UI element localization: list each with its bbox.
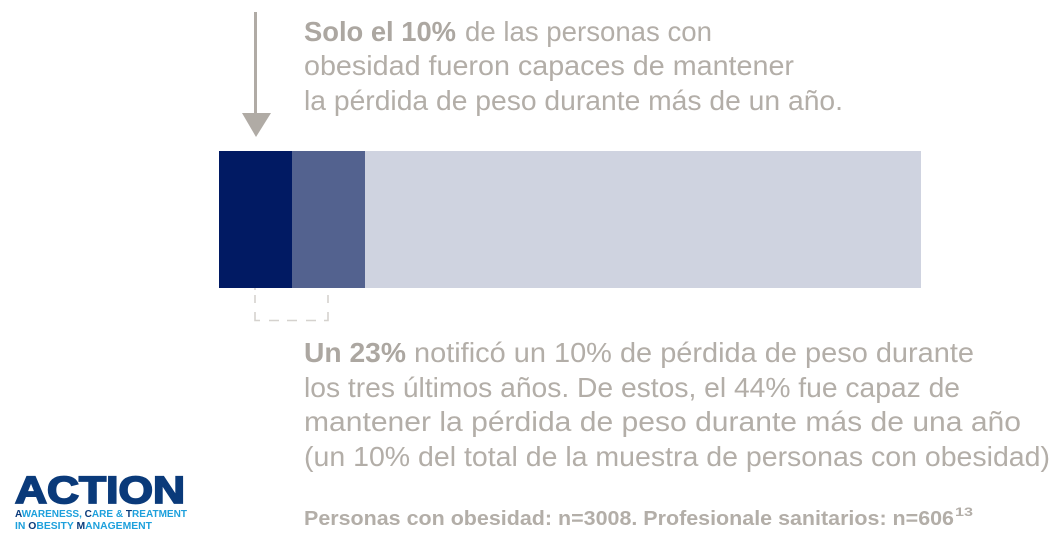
logo: ACTION — [15, 470, 187, 532]
text block: lower statement: los tres últimos años. De estos, el 44% fue capaz de — [304, 372, 960, 403]
text block: top statement — [304, 16, 843, 116]
text block: top statement: de las personas con — [465, 16, 712, 47]
text block: top statement: Solo el 10% — [304, 16, 456, 47]
text block: lower statement: Un 23% — [304, 337, 406, 368]
logo: ACTION: IN OBESITY MANAGEMENT — [15, 521, 152, 532]
logo: ACTION: AWARENESS, CARE & TREATMENT — [15, 509, 187, 520]
logo: ACTION: ACTION — [15, 470, 185, 512]
arrow pointing to bar — [242, 12, 271, 137]
dashed bracket under bar — [255, 288, 328, 320]
text block: lower statement: notificó un 10% de pérdida de peso durante — [414, 337, 974, 368]
text block: lower statement: (un 10% del total de la muestra de personas con obesidad) — [304, 441, 1050, 472]
stacked bar chart — [219, 151, 921, 288]
text block: top statement: la pérdida de peso durante más de un año. — [304, 85, 843, 116]
text block: lower statement: mantener la pérdida de peso durante más de una año — [304, 406, 1021, 437]
footnote: sample sizes: 13 — [955, 505, 973, 519]
text block: lower statement — [304, 337, 1050, 472]
text block: top statement: obesidad fueron capaces de mantener — [304, 50, 794, 81]
footnote: sample sizes: Personas con obesidad: n=3008. Profesionale sanitarios: n=606 — [304, 508, 954, 530]
